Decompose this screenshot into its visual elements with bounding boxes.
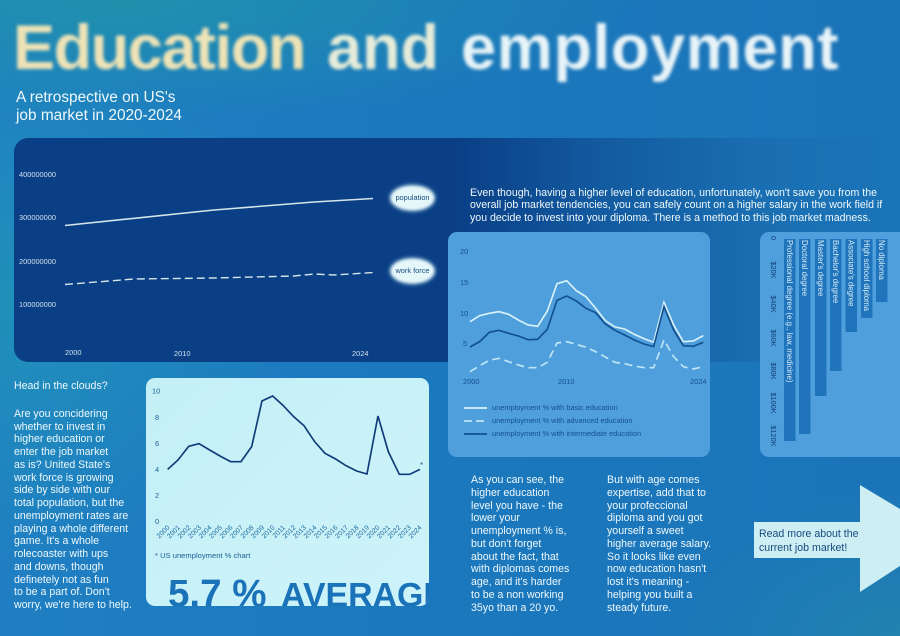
advanced line [470, 340, 703, 372]
intro paragraph: Even though, having a higher level of education, unfortunately, won't save you from the [470, 186, 877, 198]
y axis labels: 15 [460, 278, 468, 287]
x axis labels: 2018 [345, 524, 361, 540]
y axis labels: 2 [155, 491, 159, 500]
bar labels: Master's degree [816, 240, 825, 297]
arrow text: Read more about the [759, 528, 859, 540]
y axis labels: 10 [152, 386, 160, 396]
y axis labels: 10 [460, 309, 468, 318]
axis labels: $120K [769, 425, 778, 447]
right text column: But with age comes [607, 474, 699, 486]
x axis labels: 2024 [408, 524, 424, 540]
x axis labels: 2002 [177, 524, 193, 540]
x axis labels: 2001 [166, 524, 182, 540]
population label [387, 182, 438, 214]
right text column: higher average salary. [607, 538, 711, 550]
x axis labels: 2015 [313, 524, 329, 540]
subtitle [16, 89, 182, 124]
subtitle: job market in 2020-2024 [16, 107, 182, 124]
panel: salary bar chart [760, 232, 900, 457]
asterisk: * [420, 461, 423, 470]
x axis labels: 2020 [366, 524, 382, 540]
x axis labels: 2010 [261, 524, 277, 540]
y axis labels: 300000000 [19, 213, 56, 222]
arrow text: current job market! [759, 542, 847, 554]
basic line [470, 281, 703, 342]
bars [784, 239, 888, 441]
left text block: worry, we're here to help. [14, 599, 132, 611]
intro paragraph: you decide to invest into your diploma. There is a method to this job market madness. [470, 212, 871, 224]
axis labels: $60K [769, 329, 778, 347]
middle text column: 35yo than a 20 yo. [471, 602, 558, 614]
left text block [14, 380, 132, 611]
work force label: work force [395, 266, 430, 275]
right text column: expertise, add that to [607, 487, 706, 499]
right text column: your profeccional [607, 500, 688, 512]
left text block: playing a whole different [14, 522, 128, 534]
middle text column: to be a non working [471, 589, 563, 601]
middle text column: but don't forget [471, 538, 541, 550]
middle text column: As you can see, the [471, 474, 564, 486]
middle text column: higher education [471, 487, 549, 499]
y axis labels [460, 247, 468, 348]
y axis labels: 0 [155, 517, 159, 526]
bar labels: Doctoral degree [800, 240, 809, 297]
intro paragraph: overall job market tendencies, you can safely count on a higher salary in the work field if [470, 199, 882, 211]
middle text column: unemployment % is, [471, 525, 566, 537]
right text column [607, 474, 711, 614]
middle text column [471, 474, 569, 614]
left text block: definetely not as fun [14, 574, 109, 586]
subtitle: A retrospective on US's [16, 89, 175, 106]
x axis labels: 2023 [397, 524, 413, 540]
axis labels: $40K [769, 295, 778, 313]
y axis labels: 6 [155, 439, 159, 448]
axis labels: $80K [769, 362, 778, 380]
arrow callout [754, 485, 900, 592]
left text block: as is? United State's [14, 459, 110, 471]
y axis labels: 4 [155, 465, 159, 474]
bar labels [785, 240, 886, 383]
left text block: game. It's a whole [14, 535, 99, 547]
unemployment line [168, 396, 420, 474]
bar labels: Associate's degree [846, 240, 856, 307]
title: Education [13, 13, 305, 83]
y axis labels: 20 [460, 247, 468, 256]
right text column: helping you built a [607, 589, 692, 601]
x axis labels: 2000 [65, 348, 81, 357]
legend: unemployment % with intermediate education [492, 429, 641, 438]
legend: unemployment % with advanced education [492, 416, 633, 425]
panel: unemployment by education chart [448, 232, 710, 457]
legend [464, 403, 641, 438]
x axis labels: 2011 [272, 524, 287, 540]
average stat [168, 572, 446, 616]
x axis labels: 2008 [240, 524, 256, 540]
y axis labels: 8 [155, 413, 159, 422]
chart caption: * US unemployment % chart [155, 551, 251, 560]
title: and [327, 13, 439, 83]
intermediate line [470, 296, 703, 347]
left text block: whether to invest in [14, 420, 105, 432]
x axis labels: 2010 [174, 349, 190, 358]
left text block: enter the job market [14, 446, 108, 458]
x axis labels: 2017 [334, 524, 350, 540]
left text block: higher education or [14, 433, 105, 445]
x axis labels: 2022 [387, 524, 403, 540]
x axis labels: 2004 [198, 524, 214, 540]
bar labels: Professional degree (e.g., law, medicine) [785, 240, 794, 383]
population line [65, 198, 373, 226]
population label: population [395, 193, 430, 202]
x axis labels: 2012 [282, 524, 298, 540]
left text block: rolecoaster with ups [14, 548, 108, 560]
bar labels: High school diploma [862, 240, 871, 312]
middle text column: with diplomas comes [471, 563, 569, 575]
x axis labels [65, 348, 368, 358]
left text block: side by side with our [14, 484, 110, 496]
right text column: steady future. [607, 602, 671, 614]
x axis labels: 2000 [156, 524, 172, 540]
x axis labels: 2010 [558, 377, 574, 386]
right text column: diploma and you got [607, 512, 702, 524]
x axis labels [156, 524, 424, 540]
work force label [387, 254, 438, 288]
panel: US unemployment chart [146, 378, 429, 606]
y axis labels: 100000000 [19, 300, 56, 309]
work force line [65, 272, 373, 284]
x axis labels: 2013 [292, 524, 308, 540]
title [13, 13, 840, 84]
axis labels [769, 236, 778, 447]
x axis labels: 2007 [229, 524, 245, 540]
right text column: So it looks like even [607, 550, 701, 562]
middle text column: age, and it's harder [471, 576, 561, 588]
x axis labels: 2021 [376, 524, 392, 540]
right text column: now education hasn't [607, 563, 706, 575]
right text column: lost it's meaning - [607, 576, 689, 588]
bar labels: Bachelor's degree [831, 240, 840, 304]
right text column: yourself a sweet [607, 525, 684, 537]
x axis labels [463, 377, 706, 386]
x axis labels: 2024 [352, 349, 368, 358]
left text block: total population, but the [14, 497, 124, 509]
left text block: to be a part of. Don't [14, 586, 110, 598]
y axis labels: 200000000 [19, 257, 56, 266]
x axis labels: 2003 [187, 524, 203, 540]
title: employment [461, 13, 839, 83]
panel: population chart [14, 138, 900, 362]
bar labels: No diploma [877, 240, 886, 281]
axis labels: 0 [769, 236, 778, 240]
intro paragraph [470, 186, 882, 224]
axis labels: $100K [769, 392, 778, 414]
x axis labels: 2019 [355, 524, 371, 540]
x axis labels: 2009 [250, 524, 266, 540]
middle text column: lower your [471, 512, 520, 524]
x axis labels: 2024 [690, 377, 706, 386]
middle text column: about the fact, that [471, 550, 559, 562]
x axis labels: 2000 [463, 377, 479, 386]
y axis labels: 5 [463, 339, 467, 348]
arrow text [759, 528, 859, 554]
x axis labels: 2016 [324, 524, 340, 540]
y axis labels [19, 170, 56, 309]
x axis labels: 2006 [219, 524, 235, 540]
middle text column: level you have - the [471, 500, 563, 512]
left text block: unemployment rates are [14, 510, 128, 522]
left text block: and downs, though [14, 561, 104, 573]
left text block: work force is growing [14, 472, 114, 484]
y axis labels [152, 386, 160, 526]
legend: unemployment % with basic education [492, 403, 618, 412]
y axis labels: 400000000 [19, 170, 56, 179]
x axis labels: 2005 [208, 524, 224, 540]
left text block: Head in the clouds? Are you concidering [14, 380, 108, 420]
x axis labels: 2014 [303, 524, 319, 540]
axis labels: $20K [769, 261, 778, 279]
